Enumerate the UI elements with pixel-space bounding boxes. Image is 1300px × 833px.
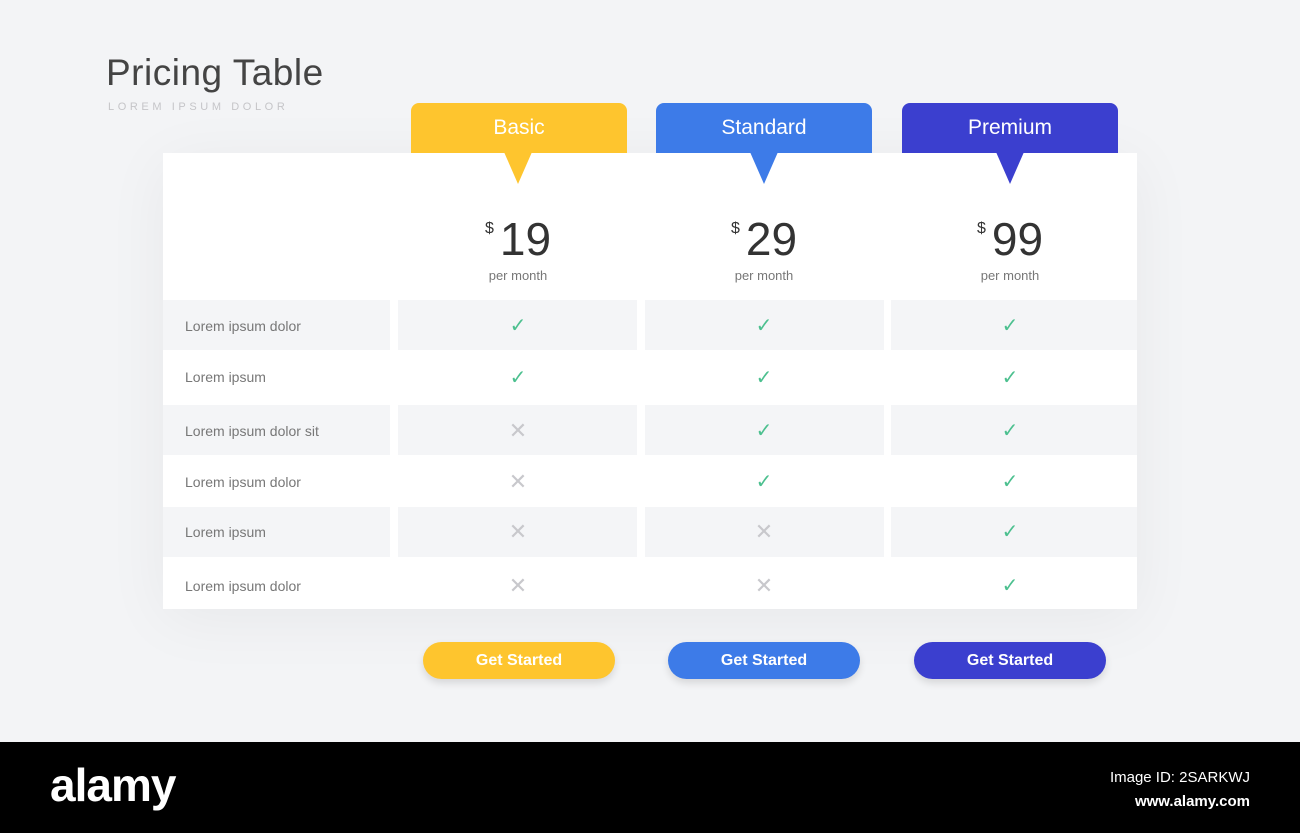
- feature rows: ✕: [509, 573, 527, 598]
- feature rows: ✕: [509, 519, 527, 544]
- tab: premium: Premium: [968, 116, 1052, 139]
- feature rows: ✓: [1002, 315, 1018, 337]
- button: basic: [423, 642, 615, 679]
- feature rows: Lorem ipsum dolor: [185, 474, 301, 490]
- subtitle: LOREM IPSUM DOLOR: [108, 101, 288, 113]
- feature rows: ✕: [509, 418, 527, 443]
- button: standard: Get Started: [721, 652, 807, 669]
- feature rows: ✓: [1002, 521, 1018, 543]
- pointer: standard: [750, 152, 778, 184]
- feature rows: ✓: [1002, 367, 1018, 389]
- feature rows: Lorem ipsum dolor: [185, 578, 301, 594]
- feature rows: ✓: [510, 367, 526, 389]
- feature rows: ✓: [1002, 471, 1018, 493]
- image id: www.alamy.com: [1135, 793, 1250, 810]
- feature rows: ✕: [755, 573, 773, 598]
- button: premium: [914, 642, 1106, 679]
- button: basic: Get Started: [476, 652, 562, 669]
- feature rows: ✕: [509, 469, 527, 494]
- feature rows: Lorem ipsum: [185, 524, 266, 540]
- feature rows: ✓: [510, 315, 526, 337]
- per month standard: per month: [735, 268, 793, 283]
- title: Pricing Table: [106, 52, 324, 93]
- feature rows: ✓: [756, 471, 772, 493]
- tab: premium: [902, 103, 1118, 153]
- feature rows: Lorem ipsum dolor: [185, 318, 301, 334]
- price: premium: $99: [977, 213, 1043, 265]
- tab: standard: Standard: [721, 116, 807, 139]
- footer band: [0, 742, 1300, 833]
- per month basic: per month: [489, 268, 547, 283]
- feature rows: ✓: [756, 367, 772, 389]
- feature rows: ✓: [1002, 575, 1018, 597]
- feature rows: Lorem ipsum: [185, 369, 266, 385]
- pointer: basic: [504, 152, 532, 184]
- feature rows: ✓: [756, 420, 772, 442]
- feature rows: Lorem ipsum dolor sit: [185, 423, 319, 439]
- feature rows: ✕: [755, 519, 773, 544]
- per month premium: per month: [981, 268, 1039, 283]
- button: premium: Get Started: [967, 652, 1053, 669]
- tab: standard: [656, 103, 872, 153]
- panel: table: [163, 153, 1137, 609]
- tab: basic: Basic: [493, 116, 545, 139]
- feature rows: ✓: [1002, 420, 1018, 442]
- price: standard: $29: [731, 213, 797, 265]
- feature rows: ✓: [756, 315, 772, 337]
- image id: [1110, 769, 1250, 810]
- button: standard: [668, 642, 860, 679]
- tab: basic: [411, 103, 627, 153]
- price: basic: $19: [485, 213, 551, 265]
- image id: Image ID: 2SARKWJ: [1110, 769, 1250, 786]
- pointer: premium: [996, 152, 1024, 184]
- alamy logo: alamy: [50, 759, 175, 811]
